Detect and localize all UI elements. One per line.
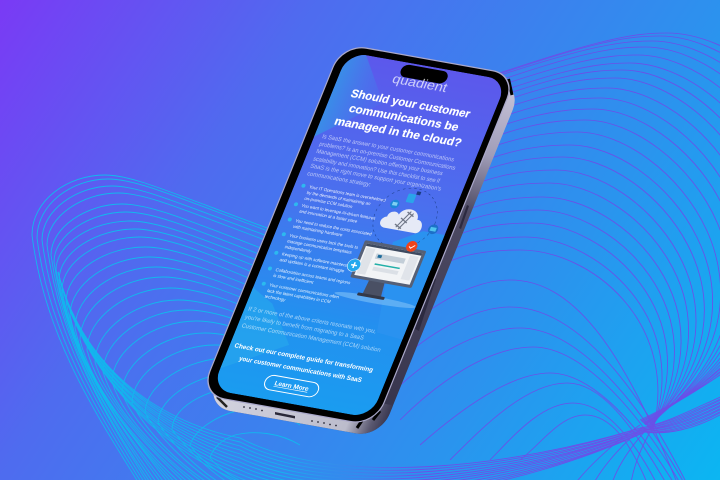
- logo: quadient: [390, 71, 450, 95]
- icon: cloud: [378, 205, 428, 234]
- red check badge: [404, 240, 419, 253]
- item 5: [271, 250, 356, 275]
- item 5: and updates is a constant struggle: [279, 257, 346, 274]
- intro paragraph: communications strategy:: [306, 171, 372, 188]
- icon: device: [405, 190, 421, 204]
- closing paragraph: Customer Communication Management (CCM) solution: [240, 323, 381, 354]
- item 1: Your IT Operations team is overwhelmed: [308, 184, 387, 203]
- learn more button: Learn More: [273, 380, 310, 393]
- item 4: Your business users lack the tools to: [289, 233, 360, 250]
- item 6: is slow and inefficient: [272, 273, 315, 285]
- item 7: technology: [264, 294, 287, 302]
- icon: chain: [393, 210, 415, 231]
- item 7: lack the latest capabilities in CCM: [266, 288, 332, 304]
- charging port and speakers: [243, 406, 337, 426]
- item 6: Collaboration across teams and regions: [275, 267, 352, 285]
- item 4: independently: [284, 244, 313, 254]
- closing paragraph: If 2 or more of the above criteria resonate with you,: [247, 307, 377, 335]
- monitor screen: [354, 243, 422, 285]
- item 2: and innovation at a faster pace: [298, 209, 359, 224]
- icon: envelope: [389, 199, 401, 209]
- item 7: [256, 281, 341, 311]
- intro paragraph: scalability and innovation? Use this checklist to see if: [312, 157, 441, 185]
- item 6: [265, 266, 352, 291]
- call to action: Check out our complete guide for transforming: [233, 343, 374, 374]
- phone front face: [200, 43, 518, 427]
- lower mesh band: [58, 272, 720, 480]
- icon: chat: [426, 224, 440, 235]
- blue plus badge: [345, 258, 363, 272]
- call to action: your customer communications with SaaS: [238, 356, 363, 384]
- closing paragraph: you're likely to benefit from migrating to a SaaS: [244, 315, 365, 342]
- antenna bands: [217, 78, 512, 428]
- intro paragraph: [306, 134, 459, 201]
- right purple wave mesh: [390, 33, 720, 480]
- notch: [398, 64, 450, 84]
- side buttons: [415, 205, 469, 331]
- intro paragraph: Is SaaS the answer to your customer communications: [321, 134, 455, 163]
- left cyan wave mesh: [32, 175, 300, 480]
- intro paragraph: problems? Is an on-premise Customer Communications: [318, 142, 456, 172]
- item 1: on-premise CCM solution: [304, 196, 354, 209]
- phone: [200, 43, 522, 438]
- title: Should your customer: [349, 88, 472, 121]
- checklist: [256, 183, 387, 312]
- item 4: manage communication templates: [286, 239, 354, 255]
- item 3: [285, 217, 373, 242]
- item 5: Keeping up with software maintenance: [281, 251, 356, 269]
- item 3: with maintaining hardware: [292, 224, 344, 237]
- screen background: [212, 52, 507, 418]
- intro paragraph: Management (CCM) solution offering your business: [315, 149, 444, 177]
- item 1: by the demands of maintaining an: [306, 190, 372, 206]
- learn more button: [262, 374, 321, 398]
- cloud illustration: [363, 183, 452, 254]
- title: managed in the cloud?: [332, 116, 463, 150]
- phone side casing: [213, 91, 515, 434]
- item 3: You need to reduce the costs associated: [295, 218, 373, 237]
- intro paragraph: SaaS is the right move to support your organization's: [309, 164, 442, 193]
- item 1: [296, 183, 387, 214]
- item 7: Your customer communications often: [269, 282, 341, 300]
- monitor illustration: [333, 231, 440, 311]
- item 2: [291, 202, 377, 227]
- item 4: [276, 232, 360, 261]
- closing paragraph: [240, 307, 388, 354]
- title: communications be: [347, 103, 461, 134]
- item 2: You want to leverage AI-driven features: [301, 203, 377, 221]
- title: [332, 87, 475, 150]
